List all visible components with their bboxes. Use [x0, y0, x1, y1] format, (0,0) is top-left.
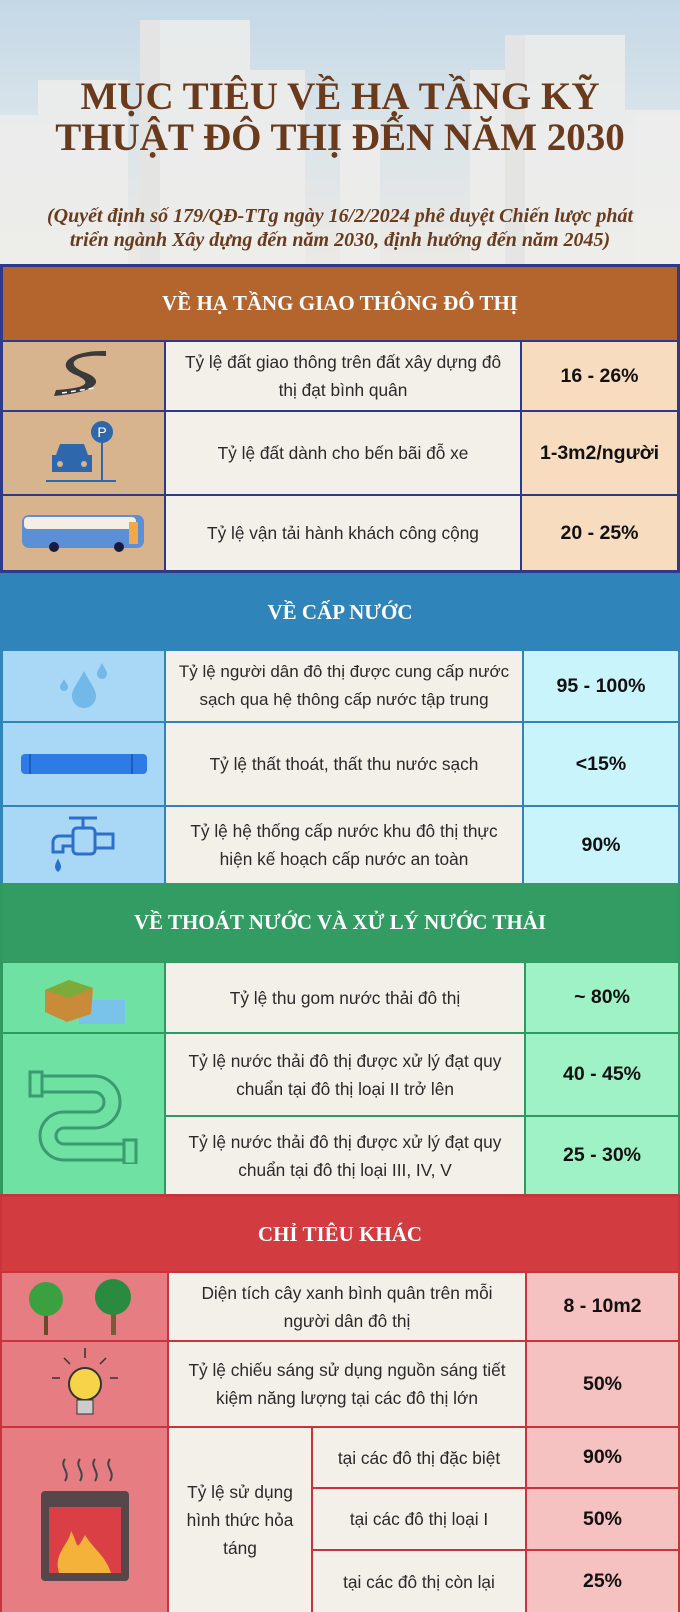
title: MỤC TIÊU VỀ HẠ TẦNG KỸ [80, 75, 600, 118]
heading: chi tieu khac [2, 1197, 678, 1271]
title [55, 74, 625, 159]
panel: giao thong [0, 264, 680, 573]
value [527, 1489, 678, 1549]
text: Tỷ lệ hệ thống cấp nước khu đô thị thực hiện kế hoạch cấp nước an toàn [190, 821, 498, 869]
text: Tỷ lệ thu gom nước thải đô thị [230, 988, 460, 1008]
value [526, 1034, 678, 1115]
text: Tỷ lệ nước thải đô thị được xử lý đạt quy chuẩn tại đô thị loại II trở lên [189, 1050, 501, 1098]
heading: giao thong [3, 267, 677, 340]
icon: parking: P [97, 424, 106, 440]
panel: cap nuoc [0, 573, 680, 883]
icon: trees [2, 1273, 167, 1340]
value [526, 1117, 678, 1194]
text: Tỷ lệ đất dành cho bến bãi đỗ xe [218, 443, 468, 463]
text: Tỷ lệ người dân đô thị được cung cấp nước sạch qua hệ thông cấp nước tập trung [179, 662, 509, 709]
value: 1-3m2/người [540, 442, 659, 464]
text: Diện tích cây xanh bình quân trên mỗi người dân đô thị [201, 1282, 493, 1330]
heading: cap nuoc: VỀ CẤP NƯỚC [267, 600, 413, 624]
value: 40 - 45% [563, 1063, 641, 1085]
value [527, 1551, 678, 1612]
text [166, 723, 522, 805]
subtitle: (Quyết định số 179/QĐ-TTg ngày 16/2/2024 phê duyệt Chiến lược phát [47, 205, 633, 227]
header background: city skyline [0, 0, 680, 266]
value: 95 - 100% [557, 674, 645, 696]
value [524, 723, 678, 805]
icon: wastewater [3, 963, 164, 1032]
text [313, 1551, 525, 1612]
value [526, 963, 678, 1032]
value: 20 - 25% [560, 522, 639, 544]
icon: light bulb [2, 1342, 167, 1426]
text: Tỷ lệ đất giao thông trên đất xây dựng đô thị đạt bình quân [185, 352, 501, 400]
value [527, 1273, 678, 1340]
text [313, 1428, 525, 1487]
text [166, 496, 520, 570]
text: Tỷ lệ chiếu sáng sử dụng nguồn sáng tiết kiệm năng lượng tại các đô thị lớn [188, 1360, 506, 1408]
text [169, 1342, 525, 1426]
text: tại các đô thị còn lại [343, 1572, 495, 1592]
value [527, 1342, 678, 1426]
icon: parking [3, 412, 164, 494]
text: Tỷ lệ thất thoát, thất thu nước sạch [210, 754, 478, 774]
heading: giao thong: VỀ HẠ TẦNG GIAO THÔNG ĐÔ THỊ [162, 291, 518, 315]
value: <15% [576, 752, 626, 774]
title: THUẬT ĐÔ THỊ ĐẾN NĂM 2030 [55, 116, 625, 159]
value: 50% [583, 1508, 622, 1530]
text: Tỷ lệ vận tải hành khách công cộng [207, 523, 479, 543]
value [522, 496, 677, 570]
heading: chi tieu khac: CHỈ TIÊU KHÁC [258, 1222, 422, 1246]
text: tại các đô thị đặc biệt [338, 1448, 500, 1468]
text [166, 1117, 524, 1194]
value [524, 651, 678, 721]
subtitle [47, 205, 634, 251]
text [166, 651, 522, 721]
value [527, 1428, 678, 1487]
panel: chi tieu khac [0, 1194, 680, 1612]
icon: drain pipe [3, 1034, 164, 1194]
icon: pipe [3, 723, 164, 805]
value: 16 - 26% [560, 364, 639, 386]
icon: cremation furnace [2, 1428, 167, 1612]
icon: faucet [3, 807, 164, 883]
value [524, 807, 678, 883]
value [522, 342, 677, 410]
text [166, 1034, 524, 1115]
text: Tỷ lệ sử dụng hình thức hỏa táng [187, 1482, 293, 1558]
value: ~ 80% [574, 986, 630, 1008]
value [522, 412, 677, 494]
heading: thoat nuoc [2, 883, 678, 962]
text [313, 1489, 525, 1549]
text [166, 963, 524, 1032]
value: 90% [581, 834, 621, 856]
subtitle: triển ngành Xây dựng đến năm 2030, định hướng đến năm 2045) [70, 229, 610, 251]
panel: thoat nuoc [0, 883, 680, 1194]
text [166, 342, 520, 410]
text [166, 412, 520, 494]
value: 8 - 10m2 [563, 1295, 642, 1317]
text: tại các đô thị loại I [350, 1509, 488, 1529]
value: 25 - 30% [563, 1144, 641, 1166]
icon: bus [3, 496, 164, 570]
heading: cap nuoc [2, 574, 678, 650]
text [169, 1273, 525, 1340]
heading: thoat nuoc: VỀ THOÁT NƯỚC VÀ XỬ LÝ NƯỚC THẢI [134, 910, 546, 934]
icon: road [3, 342, 164, 410]
icon: water drops [3, 651, 164, 721]
value: 25% [583, 1570, 622, 1592]
value: 90% [583, 1446, 622, 1468]
text: Tỷ lệ nước thải đô thị được xử lý đạt quy chuẩn tại đô thị loại III, IV, V [189, 1132, 501, 1180]
text [169, 1428, 311, 1612]
text [166, 807, 522, 883]
value: 50% [583, 1372, 622, 1394]
